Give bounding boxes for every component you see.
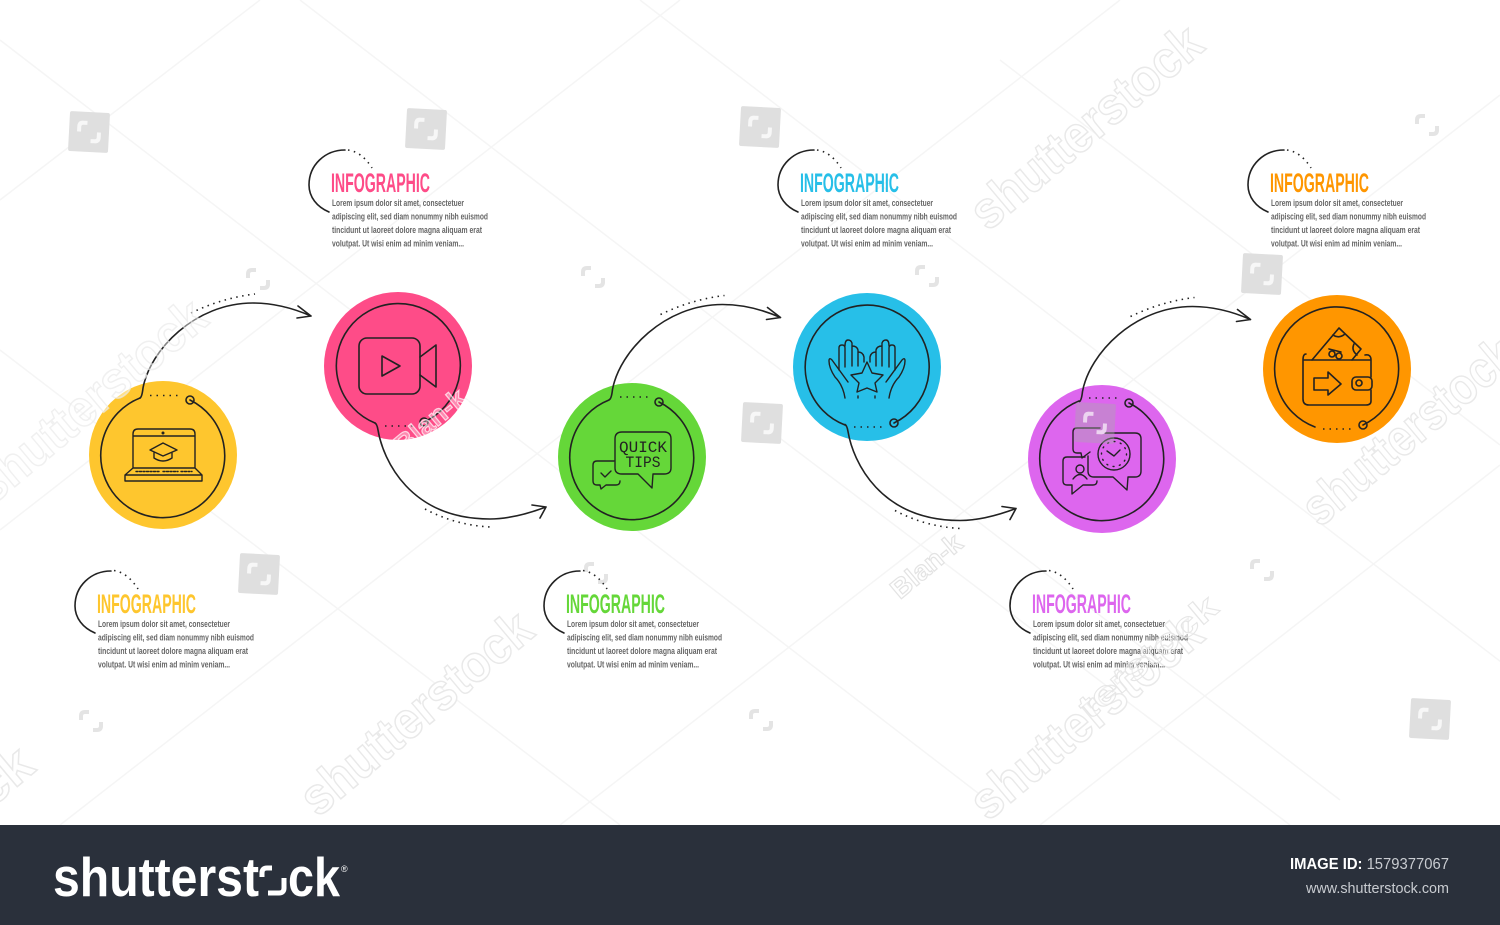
heading: INFOGRAPHIC — [1270, 168, 1369, 198]
body text: Lorem ipsum dolor sit amet, consectetuer — [801, 198, 933, 208]
watermark tile 5 — [1241, 253, 1283, 295]
watermark: shutterstock text lower right: shutterstock — [958, 604, 1214, 831]
body text: Lorem ipsum dolor sit amet, consectetuer — [567, 619, 699, 629]
arrow: pink to green — [375, 423, 546, 527]
arrow: green to blue — [610, 296, 780, 400]
body text: volutpat. Ut wisi enim ad minim veniam... — [567, 660, 699, 670]
body text: Lorem ipsum dolor sit amet, consectetuer — [98, 619, 230, 629]
body text — [1033, 619, 1188, 670]
footer logo: shutterst — [53, 846, 259, 908]
step 3 green circle: quick tips — [558, 383, 706, 531]
heading: INFOGRAPHIC — [800, 168, 899, 198]
watermark overlay: tile over purple circle — [1074, 402, 1116, 444]
ring — [805, 305, 929, 425]
heading: INFOGRAPHIC — [566, 589, 665, 619]
text block 3 green — [544, 570, 722, 670]
body text: volutpat. Ut wisi enim ad minim veniam... — [1271, 238, 1402, 248]
body text: tincidunt ut laoreet dolore magna aliquam erat — [332, 225, 482, 235]
arrow: purple to orange — [1080, 298, 1250, 402]
icon: video camera — [359, 338, 436, 394]
body text: adipiscing elit, sed diam nonummy nibh euismod — [801, 212, 957, 222]
text block 4 blue — [778, 150, 957, 248]
body text — [801, 198, 957, 248]
body text: adipiscing elit, sed diam nonummy nibh euismod — [567, 632, 722, 642]
arrow: yellow to pink — [140, 294, 311, 398]
watermark tile 6 — [238, 553, 280, 595]
icon: quick tips speech bubbles — [593, 432, 671, 489]
step 1 yellow circle: laptop — [89, 381, 237, 529]
body text: adipiscing elit, sed diam nonummy nibh euismod — [1271, 212, 1426, 222]
body text: tincidunt ut laoreet dolore magna aliquam erat — [801, 225, 951, 235]
heading: INFOGRAPHIC — [331, 168, 430, 198]
body text — [567, 619, 722, 670]
body text: tincidunt ut laoreet dolore magna aliquam erat — [1033, 646, 1183, 656]
icon: hands holding star — [829, 340, 905, 398]
ring — [101, 398, 225, 518]
body text: volutpat. Ut wisi enim ad minim veniam... — [1033, 660, 1165, 670]
watermark tile 4 — [741, 402, 783, 444]
body text: tincidunt ut laoreet dolore magna aliquam erat — [567, 646, 717, 656]
body text: volutpat. Ut wisi enim ad minim veniam... — [98, 660, 230, 670]
watermark tile 2 — [405, 108, 447, 150]
step 5 purple circle: chat with clock — [1028, 385, 1176, 533]
watermark: shutterstock text top right: shutterstock — [958, 14, 1214, 241]
ring — [1040, 401, 1164, 521]
heading: INFOGRAPHIC — [97, 589, 196, 619]
small watermark marks — [81, 116, 1437, 730]
icon: quick tips speech bubbles: QUICK — [619, 439, 667, 457]
website: www.shutterstock.com — [1305, 880, 1449, 897]
step 6 orange circle: wallet — [1263, 295, 1411, 443]
watermark tile 7 — [1409, 698, 1451, 740]
text block 1 yellow — [75, 570, 254, 670]
ring — [570, 400, 694, 520]
watermark overlay: shutterstock over purple text: terstock — [1071, 588, 1225, 726]
body text: tincidunt ut laoreet dolore magna aliquam erat — [98, 646, 248, 656]
step 4 blue circle: hands with star — [793, 293, 941, 441]
ring — [1275, 307, 1399, 427]
footer logo: ® — [341, 864, 348, 874]
watermark tile 3 — [739, 106, 781, 148]
step 2 pink circle: video camera — [324, 292, 472, 440]
icon: speech bubbles with clock and person — [1063, 428, 1141, 494]
body text: Lorem ipsum dolor sit amet, consectetuer — [332, 198, 464, 208]
text block 6 orange — [1248, 150, 1426, 248]
text block 5 purple — [1010, 570, 1188, 670]
watermark overlay: Blan-k over pink circle: Blan-k — [389, 382, 473, 460]
body text: Lorem ipsum dolor sit amet, consectetuer — [1033, 619, 1165, 629]
body text — [332, 198, 488, 248]
body text: Lorem ipsum dolor sit amet, consectetuer — [1271, 198, 1403, 208]
body text — [1271, 198, 1426, 248]
ring — [336, 304, 460, 423]
watermark: shutterstock text lower middle: shutterstock — [288, 600, 544, 827]
footer logo: ck — [288, 846, 340, 908]
body text: adipiscing elit, sed diam nonummy nibh euismod — [98, 632, 254, 642]
body text: tincidunt ut laoreet dolore magna aliquam erat — [1271, 225, 1420, 235]
icon: laptop with graduation cap — [125, 429, 202, 481]
text block 2 pink — [309, 150, 488, 248]
arrow: blue to purple — [845, 424, 1016, 528]
icon: quick tips speech bubbles: TIPS — [626, 454, 660, 472]
icon: wallet with banknote and arrow — [1303, 328, 1372, 405]
body text: adipiscing elit, sed diam nonummy nibh euismod — [332, 212, 488, 222]
watermark tile 1 — [68, 111, 110, 153]
image id: IMAGE ID: 1579377067 — [1290, 856, 1449, 873]
body text: volutpat. Ut wisi enim ad minim veniam... — [801, 238, 933, 248]
body text: adipiscing elit, sed diam nonummy nibh euismod — [1033, 632, 1188, 642]
heading: INFOGRAPHIC — [1032, 589, 1131, 619]
footer bar — [0, 825, 1500, 925]
body text — [98, 619, 254, 670]
body text: volutpat. Ut wisi enim ad minim veniam... — [332, 238, 464, 248]
watermark: Blan-k lower: Blan-k — [885, 527, 969, 605]
